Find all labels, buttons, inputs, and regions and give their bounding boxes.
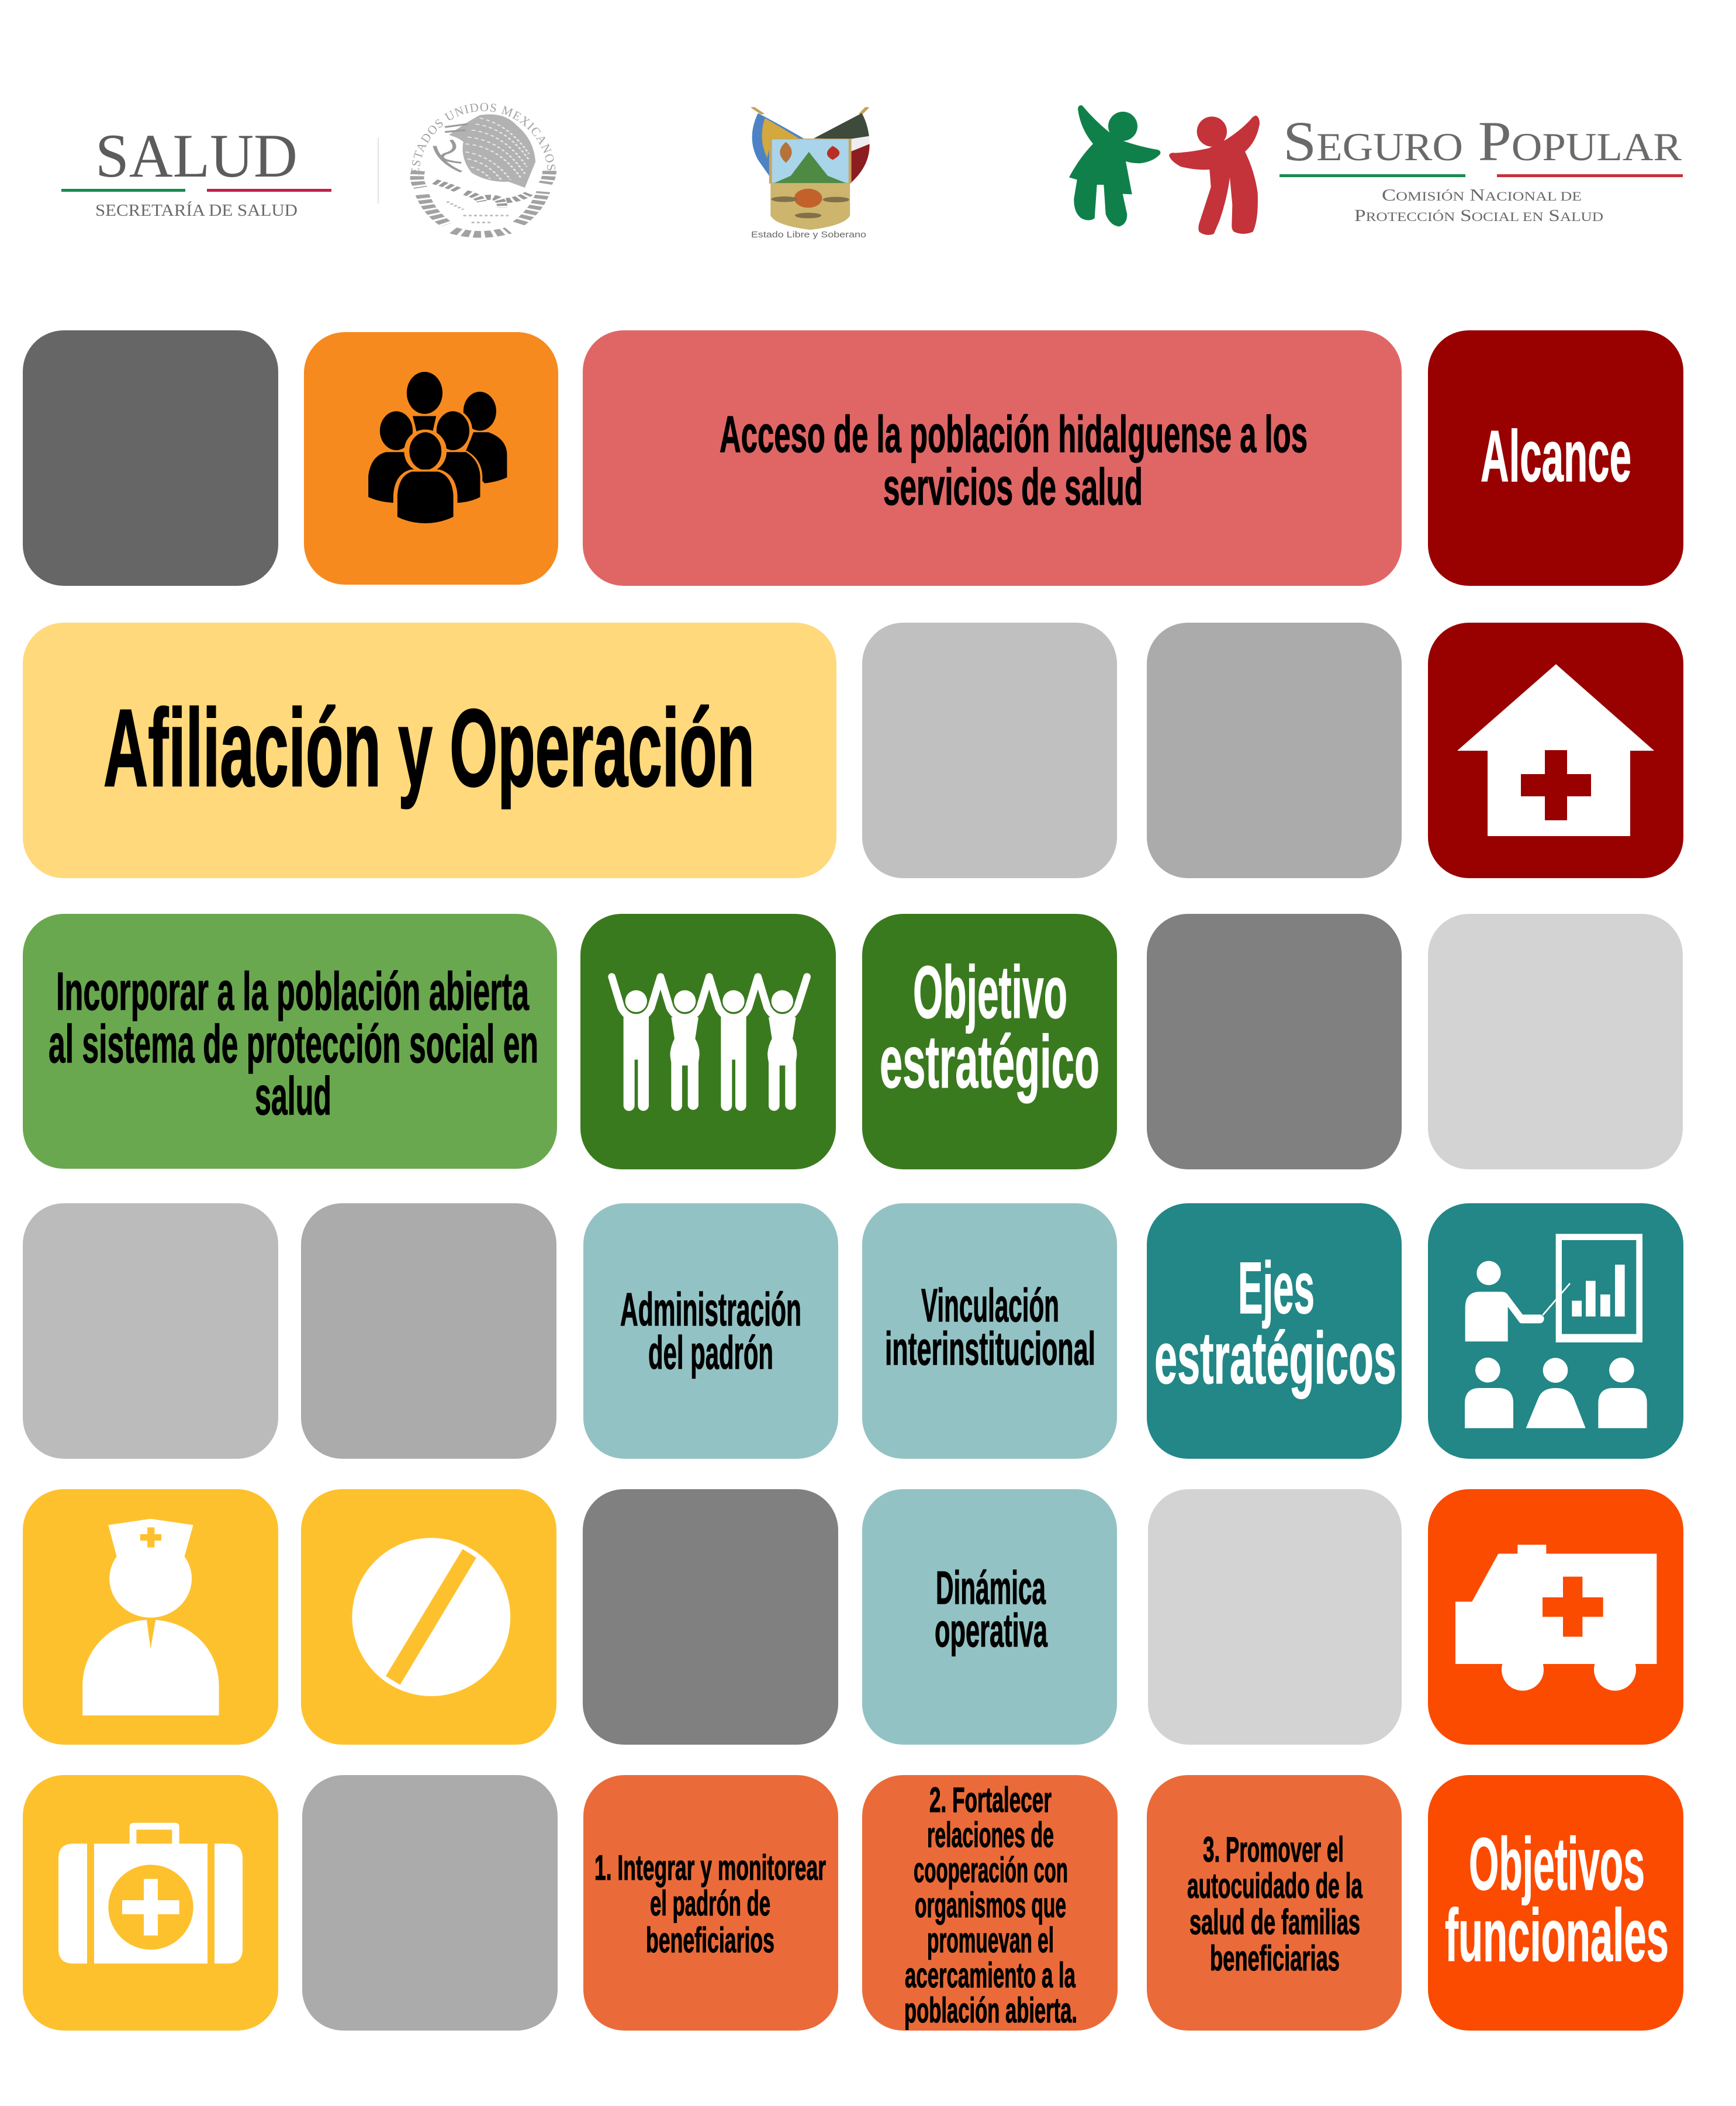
text: acceso: servicios de salud — [883, 458, 1143, 516]
logo: Salud, Secretaría de Salud: SECRETARÍA DE SALUD — [95, 201, 298, 220]
logo: Mexican national seal — [410, 103, 556, 238]
panel: objetivo funcional 2: población abierta. — [904, 1991, 1077, 2030]
panel: objetivo funcional 2: organismos que — [915, 1886, 1066, 1925]
panel: dinámica operativa — [862, 1489, 1117, 1745]
panel: objetivo estratégico: Objetivo — [913, 951, 1067, 1034]
wordmark: PROTECCIÓN SOCIAL EN SALUD — [1354, 206, 1603, 225]
panel: ejes estratégicos — [1147, 1203, 1402, 1459]
panel: objetivos funcionales — [1428, 1775, 1683, 2031]
panel: objetivo text — [23, 914, 557, 1169]
text: incorporar: salud — [255, 1066, 331, 1126]
wordmark: SEGURO POPULAR — [1283, 110, 1682, 172]
panel: objetivo funcional 1 — [583, 1775, 838, 2031]
title: Afiliación y Operación — [103, 686, 755, 809]
logo: Mexican national seal: ESTADOS UNIDOS MEXICANOS — [411, 103, 555, 175]
panel: objetivo funcional 2: 2. Fortalecer — [929, 1780, 1052, 1820]
panel: ambulance icon tile — [1428, 1489, 1683, 1745]
panel: objetivo funcional 3 — [1147, 1775, 1402, 2031]
panel: objetivo funcional 3: autocuidado de la — [1187, 1866, 1362, 1905]
row 2: gray tile light — [862, 623, 1117, 878]
row 4: gray tile medium — [301, 1203, 556, 1459]
panel: first aid kit icon tile — [23, 1775, 278, 2031]
panel: vinculación interinstitucional — [862, 1203, 1117, 1459]
panel: nurse icon tile — [23, 1489, 278, 1745]
panel: objetivo funcional 1: beneficiarios — [646, 1921, 774, 1960]
icon: ambulance — [1455, 1545, 1657, 1691]
wordmark — [1279, 110, 1683, 225]
panel: ejes estratégicos: estratégicos — [1154, 1318, 1396, 1399]
panel: acceso — [583, 330, 1402, 586]
panel: title — [23, 623, 836, 878]
logo: Salud, Secretaría de Salud: SALUD — [95, 122, 298, 190]
panel: objetivo estratégico: estratégico — [880, 1020, 1099, 1103]
row 3: gray tile pale — [1428, 914, 1683, 1169]
panel: objetivo funcional 3: salud de familias — [1189, 1903, 1360, 1942]
panel: dinámica operativa: Dinámica — [936, 1562, 1046, 1614]
panel: objetivo funcional 3: 3. Promover el — [1203, 1830, 1344, 1869]
panel: objetivo funcional 2: promuevan el — [927, 1921, 1054, 1960]
panel: objetivo funcional 1: 1. Integrar y monitorear — [594, 1848, 826, 1887]
logo: Salud, Secretaría de Salud — [61, 122, 331, 220]
panel: objetivo funcional 2 — [862, 1775, 1118, 2031]
panel: objetivo funcional 2: acercamiento a la — [905, 1956, 1076, 1995]
row 1: gray tile — [23, 330, 278, 586]
icon: teacher with chart and audience — [1465, 1234, 1647, 1428]
icon: clinic house — [1457, 664, 1654, 836]
logo: Estado Libre y Soberano de Hidalgo coat of arms — [751, 107, 870, 240]
row 5: gray tile pale — [1148, 1489, 1402, 1745]
panel: administración del padrón — [583, 1203, 838, 1459]
icon: group of people — [368, 372, 507, 523]
panel: ejes estratégicos: Ejes — [1238, 1248, 1315, 1329]
row 5: gray tile dark — [583, 1489, 838, 1745]
icon: first aid kit — [58, 1823, 243, 1963]
panel: administración del padrón: Administración — [620, 1283, 801, 1335]
panel: people icon tile — [304, 332, 558, 585]
panel: four people icon tile — [580, 914, 836, 1169]
icon: green child figure — [1069, 105, 1160, 226]
logo: Seguro Popular figures and wordmark — [1069, 105, 1683, 235]
panel: vinculación interinstitucional: Vinculación — [921, 1279, 1059, 1331]
icon: nurse — [82, 1519, 219, 1715]
panel: alcance — [1428, 330, 1683, 586]
row 2: gray tile medium — [1147, 623, 1402, 878]
panel: objetivo estratégico — [862, 914, 1117, 1169]
panel: administración del padrón: del padrón — [648, 1327, 773, 1379]
panel: objetivo funcional 1: el padrón de — [650, 1884, 770, 1923]
text: incorporar: Incorporar a la población abierta — [56, 962, 529, 1021]
text: incorporar: al sistema de protección social en — [49, 1014, 538, 1074]
icon: red child figure — [1169, 115, 1260, 235]
panel: vinculación interinstitucional: interinstitucional — [885, 1323, 1095, 1375]
panel: objetivo funcional 2: relaciones de — [927, 1815, 1054, 1855]
panel: pill icon tile — [301, 1489, 556, 1745]
row 6: gray tile medium — [302, 1775, 558, 2031]
panel: presentation icon tile — [1428, 1203, 1683, 1459]
text: acceso: Acceso de la población hidalguense a los — [720, 405, 1308, 463]
row 4: gray tile light — [23, 1203, 278, 1459]
text: acceso — [720, 405, 1308, 516]
icon: pill — [352, 1538, 510, 1696]
row 3: gray tile dark — [1147, 914, 1402, 1169]
panel: objetivo funcional 2: cooperación con — [914, 1850, 1068, 1890]
icon: people holding hands — [612, 977, 807, 1111]
wordmark: COMISIÓN N ACIONAL DE — [1382, 186, 1582, 205]
logo: Estado Libre y Soberano de Hidalgo coat of arms: Estado Libre y Soberano — [751, 230, 866, 240]
panel: dinámica operativa: operativa — [935, 1604, 1047, 1656]
panel: objetivo funcional 3: beneficiarias — [1210, 1939, 1340, 1978]
panel: house icon tile — [1428, 623, 1683, 878]
text: incorporar — [49, 962, 538, 1126]
